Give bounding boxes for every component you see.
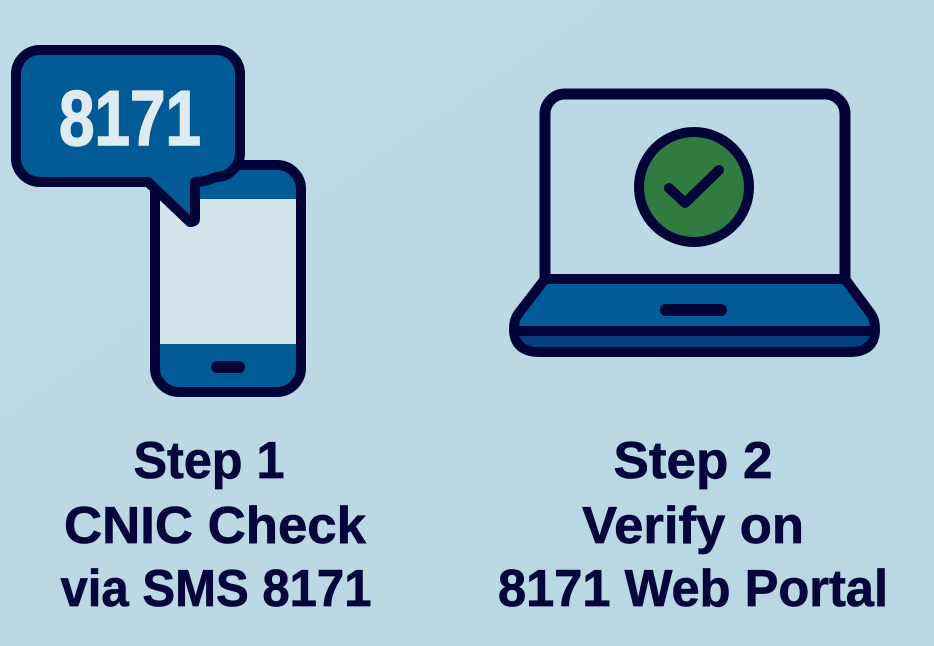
laptop screen xyxy=(545,94,845,284)
step 1 caption xyxy=(60,432,372,618)
icon: phone xyxy=(155,165,301,392)
phone home button xyxy=(211,361,245,373)
bubble number: 8171 xyxy=(59,74,201,162)
step 2 caption: Verify on xyxy=(582,497,804,555)
step 2 caption: 8171 Web Portal xyxy=(498,560,888,618)
icon: SMS speech bubble xyxy=(16,50,240,222)
laptop base xyxy=(514,279,875,352)
step 1 caption: via SMS 8171 xyxy=(60,560,372,618)
icon: green check circle xyxy=(639,132,749,242)
step 1 caption: Step 1 xyxy=(134,432,284,490)
step 2 caption: Step 2 xyxy=(614,432,772,490)
step 2 caption xyxy=(498,432,888,618)
step 1 caption: CNIC Check xyxy=(64,497,366,555)
laptop trackpad xyxy=(660,304,727,316)
icon: laptop xyxy=(514,94,875,352)
